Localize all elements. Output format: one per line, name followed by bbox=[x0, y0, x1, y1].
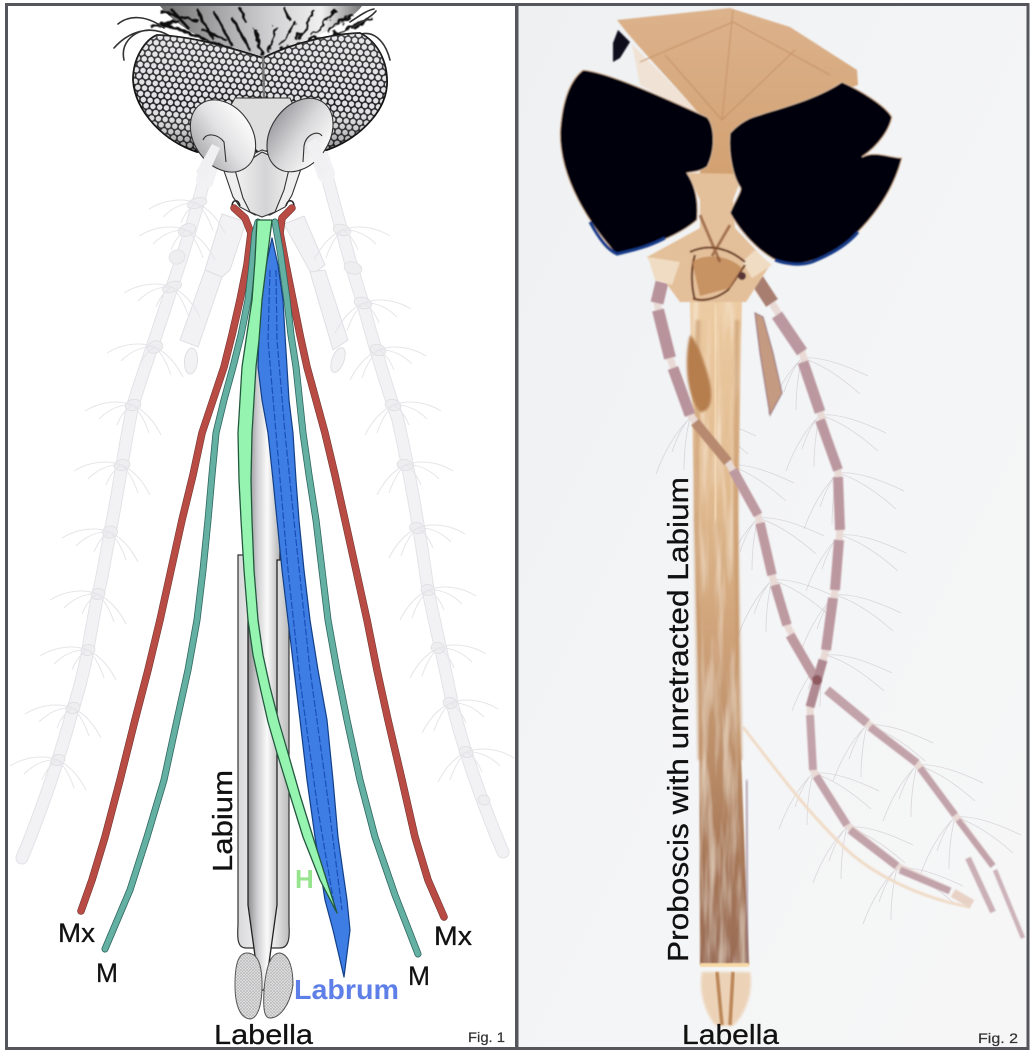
head top with hairs bbox=[114, 6, 390, 66]
photo: inner short palp bbox=[755, 313, 782, 415]
label: Labrum: Labrum bbox=[294, 974, 399, 1005]
label: M right: M bbox=[408, 961, 430, 991]
antennal bases and clypeus bbox=[177, 86, 347, 217]
label: M left: M bbox=[96, 958, 118, 988]
faded antennae and palps bbox=[10, 146, 514, 858]
label: Mx left: Mx bbox=[58, 918, 96, 948]
photo: proboscis bbox=[687, 300, 751, 1026]
labella bbox=[235, 953, 293, 1019]
label: Proboscis with unretracted Labium: Proboscis with unretracted Labium bbox=[663, 477, 695, 962]
label: Mx right: Mx bbox=[434, 921, 473, 951]
photo: palps bbox=[657, 280, 1023, 938]
photo: bristles bbox=[656, 358, 1021, 924]
panel: Fig. 1 illustration bbox=[7, 4, 516, 1050]
panel: Fig. 2 photograph bbox=[518, 4, 1028, 1050]
compound eyes bbox=[133, 33, 387, 152]
label: Labium: Labium bbox=[207, 770, 238, 872]
label: Fig. 1: Fig. 1 bbox=[468, 1030, 505, 1045]
photo: tan hair line bbox=[743, 727, 970, 907]
label: Labella: Labella bbox=[682, 1019, 779, 1050]
label: Fig. 2: Fig. 2 bbox=[978, 1031, 1018, 1046]
maxillae (red) bbox=[81, 208, 444, 917]
mandibles (teal) bbox=[105, 222, 418, 954]
labium bbox=[238, 345, 289, 990]
photo: compound eyes bbox=[560, 30, 902, 265]
photo: head capsule bbox=[617, 8, 858, 302]
hypopharynx (green) bbox=[238, 220, 337, 913]
label: H: H bbox=[295, 864, 314, 894]
label: Labella: Labella bbox=[214, 1019, 313, 1050]
labrum (blue) bbox=[258, 238, 350, 977]
